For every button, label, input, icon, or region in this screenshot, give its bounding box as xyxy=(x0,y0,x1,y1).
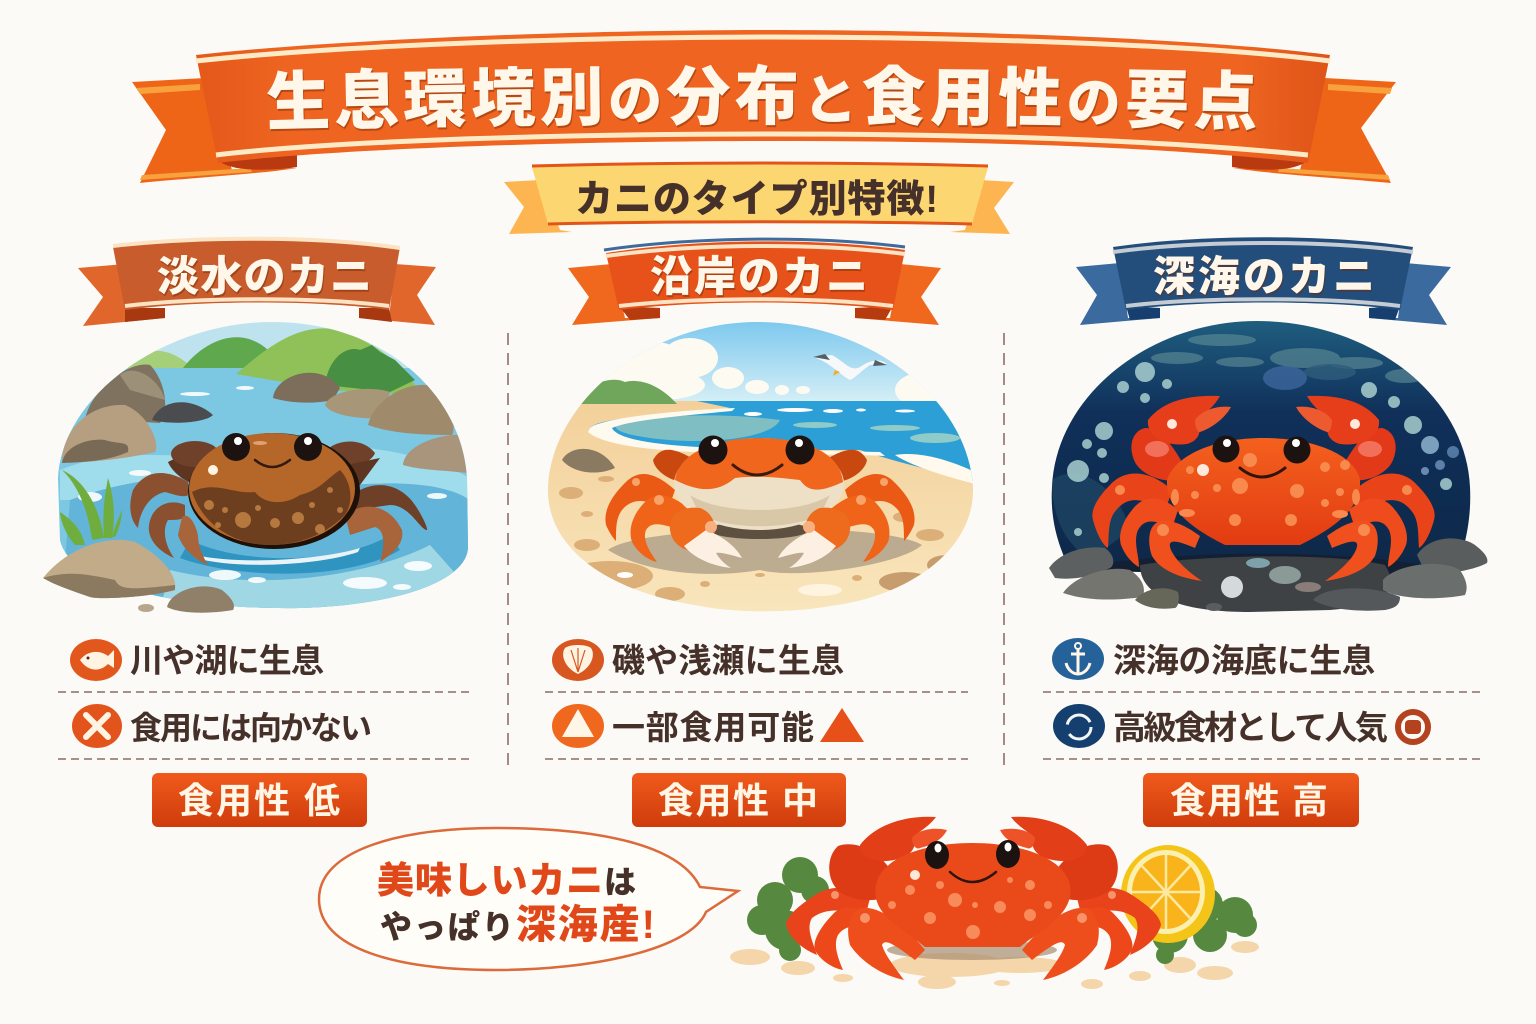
mark: triangle xyxy=(820,708,864,742)
badge: medium xyxy=(632,773,846,827)
badge: high: 食用性 高 xyxy=(1170,780,1328,821)
edibility text: 高級食材として人気 xyxy=(1113,709,1388,746)
speech bubble xyxy=(319,828,738,970)
coastal ribbon xyxy=(568,239,941,325)
scene: coast xyxy=(540,320,980,616)
icon: fish xyxy=(70,639,122,681)
badge: medium: 食用性 中 xyxy=(658,780,818,821)
freshwater heading: 淡水のカニ xyxy=(157,253,372,300)
scene: freshwater xyxy=(43,320,480,620)
crab with garnish xyxy=(730,817,1259,989)
seagull xyxy=(813,354,887,380)
sand blobs xyxy=(730,941,1259,989)
icon: shell xyxy=(552,639,604,681)
title text xyxy=(262,119,1266,125)
habitat text: 川や湖に生息 xyxy=(130,642,324,679)
coastal crab xyxy=(605,436,915,568)
subtitle text: カニのタイプ別特徴! xyxy=(575,179,938,221)
badge: low xyxy=(152,773,367,827)
column 2 list xyxy=(545,639,968,827)
freshwater ribbon xyxy=(78,239,436,326)
parsley xyxy=(747,857,1257,964)
icon: ring mark xyxy=(1398,712,1428,742)
icon: swirl xyxy=(1053,704,1105,748)
icon: triangle xyxy=(552,704,604,748)
eyes xyxy=(222,433,250,461)
title: 生息環境別の分布と食用性の要点 xyxy=(267,64,1256,132)
deep sea crab xyxy=(1092,396,1435,581)
brown crab xyxy=(130,433,427,565)
coastal heading: 沿岸のカニ xyxy=(650,253,868,300)
column 1 list xyxy=(58,639,470,827)
column 3 list xyxy=(1043,638,1482,827)
vertical dividers xyxy=(508,333,1004,768)
subtitle ribbon xyxy=(504,163,1014,234)
seabed rocks xyxy=(1049,538,1487,612)
icon: cross xyxy=(72,704,122,748)
edibility text: 一部食用可能 xyxy=(612,709,814,746)
title ribbon xyxy=(132,30,1396,183)
river rocks foreground xyxy=(43,540,234,613)
habitat text: 深海の海底に生息 xyxy=(1113,642,1375,679)
habitat text: 磯や浅瀬に生息 xyxy=(612,642,844,679)
deep sea heading: 深海のカニ xyxy=(1153,253,1375,300)
left ribbon tail xyxy=(132,78,297,183)
deep sea ribbon xyxy=(1076,237,1451,325)
scene: deep sea xyxy=(1040,318,1487,620)
lemon xyxy=(1121,845,1215,943)
edibility text: 食用には向かない xyxy=(130,710,372,746)
bubble line 2: やっぱり深海産! xyxy=(380,903,655,947)
ribbon band xyxy=(196,30,1330,163)
badge: high xyxy=(1143,773,1359,827)
crab body xyxy=(875,843,1070,947)
badge: low: 食用性 低 xyxy=(178,780,340,821)
icon: anchor xyxy=(1052,638,1104,680)
ribbon folds xyxy=(218,153,297,170)
bubble line 1: 美味しいカニは xyxy=(377,860,636,901)
right ribbon tail xyxy=(1233,78,1396,183)
